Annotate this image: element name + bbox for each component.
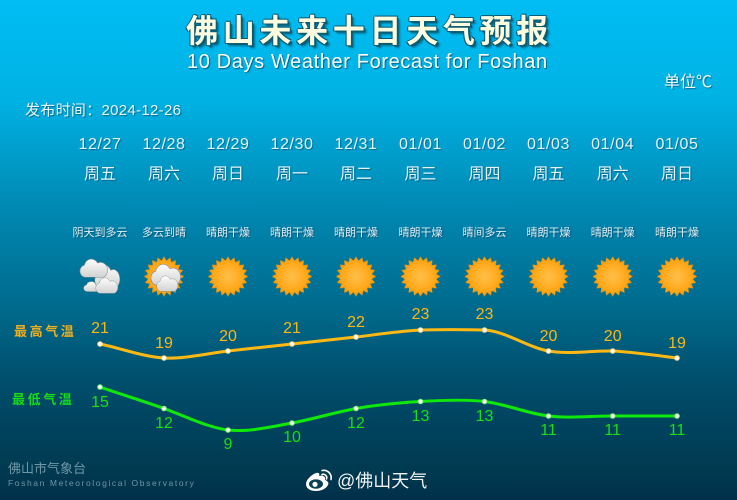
weather descriptions (72, 226, 700, 239)
low temperature values: 10 (283, 429, 301, 446)
low temperature values: 13 (476, 408, 493, 425)
dates row: 01/05 (655, 136, 699, 153)
weather descriptions: 晴朗干燥 (655, 227, 699, 239)
high temperature values: 21 (91, 320, 109, 337)
subtitle: 10 Days Weather Forecast for Foshan (187, 51, 548, 73)
dates row: 周日 (212, 166, 244, 183)
icon: cloud and sun (144, 256, 184, 296)
low temperature values: 15 (91, 394, 109, 411)
observatory name: 佛山市气象台 (8, 461, 86, 476)
low temperature values (91, 394, 685, 453)
low temperature values: 11 (604, 422, 621, 439)
dates row: 12/30 (270, 136, 314, 153)
high temperature values: 19 (155, 335, 173, 352)
dates row: 周五 (84, 166, 116, 183)
dates row: 周六 (597, 166, 629, 183)
weather descriptions: 阴天到多云 (72, 227, 128, 239)
weather descriptions: 晴间多云 (462, 227, 506, 239)
icon: sun 12/30 (272, 256, 312, 296)
dates row: 周日 (661, 166, 693, 183)
dates row: 01/02 (463, 136, 506, 153)
low temperature values: 9 (224, 436, 232, 453)
low temperature values: 13 (412, 408, 429, 425)
dates row: 01/01 (399, 136, 442, 153)
high temperature values (91, 306, 686, 352)
dates row (78, 136, 699, 183)
high temperature values: 19 (668, 335, 686, 352)
dates row: 12/29 (206, 136, 250, 153)
weather descriptions: 晴朗干燥 (591, 227, 635, 239)
high temperature values: 20 (540, 328, 557, 345)
icon: sun 01/01 (400, 256, 440, 296)
low temperature values: 11 (540, 422, 557, 439)
unit label: 单位℃ (664, 74, 712, 91)
weather descriptions: 晴朗干燥 (206, 227, 250, 239)
icon: sun 01/04 (593, 256, 633, 296)
high temperature values: 20 (219, 328, 237, 345)
low temperature values: 12 (155, 415, 173, 432)
high temperature values: 23 (412, 306, 429, 323)
icon: cloudy (80, 259, 120, 293)
dates row: 周二 (340, 166, 372, 183)
publish time: 发布时间：2024-12-26 (25, 102, 181, 119)
icon: weibo logo (306, 470, 331, 491)
high temperature values: 23 (476, 306, 493, 323)
low temperature label: 最低气温 (12, 392, 74, 407)
dates row: 周四 (468, 166, 501, 183)
low temperature values: 11 (669, 422, 685, 439)
dates row: 周三 (404, 166, 437, 183)
high temperature values: 22 (347, 314, 365, 331)
dates row: 01/03 (527, 136, 570, 153)
dates row: 周一 (276, 166, 308, 183)
dates row: 12/28 (142, 136, 186, 153)
icon: sun 01/02 (464, 256, 504, 296)
high temperature values: 20 (604, 328, 622, 345)
weather descriptions: 晴朗干燥 (270, 227, 314, 239)
icon: sun 01/05 (657, 256, 697, 296)
icon: sun 12/29 (208, 256, 248, 296)
icon: sun 01/03 (528, 256, 568, 296)
high temperature values: 21 (283, 320, 301, 337)
weather descriptions: 晴朗干燥 (398, 227, 442, 239)
high temperature line (98, 328, 679, 360)
dates row: 12/31 (334, 136, 378, 153)
low temperature line (98, 385, 679, 432)
low temperature values: 12 (347, 415, 365, 432)
weather descriptions: 多云到晴 (142, 227, 186, 239)
dates row: 01/04 (591, 136, 634, 153)
icon: sun 12/31 (336, 256, 376, 296)
high temperature label: 最高气温 (14, 324, 76, 339)
observatory English name: Foshan Meteorological Observatory (8, 478, 195, 488)
weibo handle: @佛山天气 (337, 471, 427, 491)
dates row: 12/27 (78, 136, 122, 153)
title: 佛山未来十日天气预报 (186, 13, 553, 49)
dates row: 周五 (532, 166, 565, 183)
dates row: 周六 (148, 166, 180, 183)
weather descriptions: 晴朗干燥 (526, 227, 570, 239)
weather descriptions: 晴朗干燥 (334, 227, 378, 239)
